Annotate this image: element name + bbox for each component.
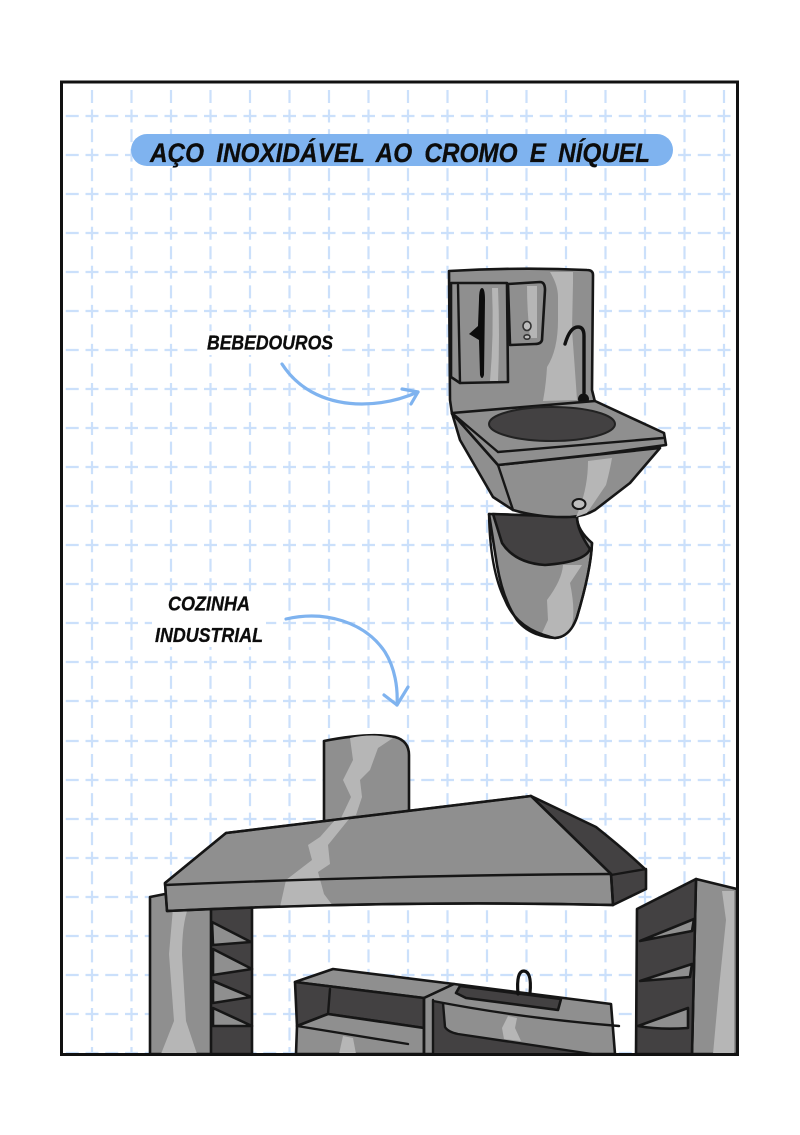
icon: industrial kitchen <box>150 735 737 1054</box>
hood side <box>531 796 646 905</box>
arrow: cozinha industrial to kitchen <box>286 616 408 705</box>
arrow: bebedouros to drinking fountain <box>282 364 418 404</box>
kitchen counter right <box>424 971 619 1054</box>
fountain basin <box>452 401 666 465</box>
label: cozinha industrial: INDUSTRIAL <box>155 625 263 647</box>
icon: drinking fountain <box>449 269 666 638</box>
fountain faucet <box>565 327 589 404</box>
label: cozinha industrial <box>152 592 266 647</box>
label: cozinha industrial: COZINHA <box>168 594 250 616</box>
hood chimney <box>324 735 409 825</box>
fountain button box <box>508 282 545 345</box>
fountain bowl underside <box>452 413 660 517</box>
fountain pedestal <box>489 514 592 638</box>
fountain back panel <box>449 269 595 414</box>
hood body <box>165 796 613 911</box>
page frame <box>62 82 738 1054</box>
left shelf cabinet <box>150 893 252 1054</box>
kitchen counter left <box>295 969 454 1054</box>
label: bebedouros: BEBEDOUROS <box>207 332 334 354</box>
right shelf cabinet <box>636 879 737 1054</box>
title: AÇO INOXIDÁVEL AO CROMO E NÍQUEL <box>149 137 650 168</box>
fountain cabinet <box>451 283 508 383</box>
